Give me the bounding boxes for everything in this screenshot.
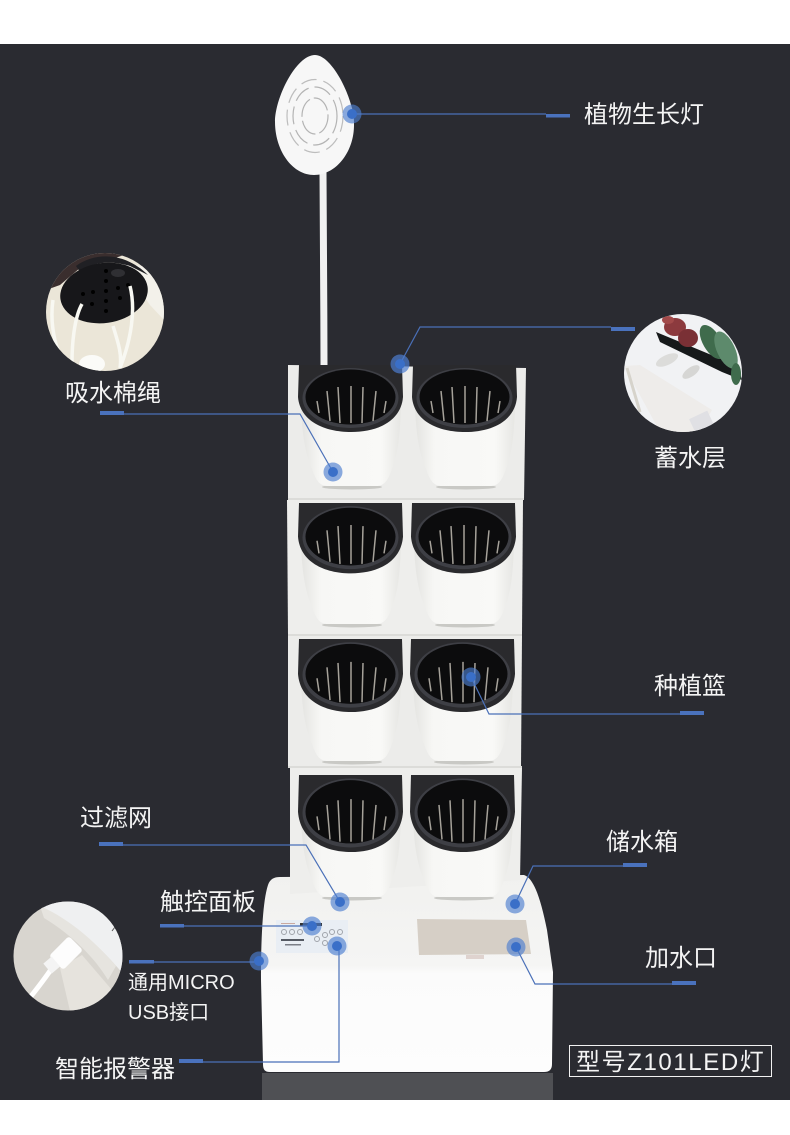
callout: growth lamp [342,104,570,124]
inset photo: reservoir layer [624,314,743,435]
label: water tank: 储水箱 [606,829,678,856]
callout: USB port [129,952,268,970]
label: reservoir layer: 蓄水层 [654,445,726,472]
label: USB port [128,971,235,1024]
growth lamp head [275,55,354,175]
tower body [287,365,526,894]
water tank base [261,875,553,1072]
label: water inlet: 加水口 [645,945,717,972]
callout: water inlet [506,938,696,985]
label: touch panel: 触控面板 [160,889,256,916]
callout: wicking cord [100,411,342,482]
label: USB port: 通用MICRO [128,971,235,994]
callout: planting basket [462,668,704,715]
inset photo: wicking cord [46,253,164,373]
label: USB port: USB接口 [128,1001,209,1024]
planting pots [298,365,517,900]
base reflection [262,1073,553,1100]
label: wicking cord: 吸水棉绳 [65,380,161,407]
label: planting basket: 种植篮 [654,673,726,700]
label: growth lamp: 植物生长灯 [584,102,704,128]
touch control panel [276,920,348,953]
label: filter: 过滤网 [80,805,152,832]
label: smart alarm: 智能报警器 [55,1056,175,1083]
model badge: 型号Z101LED灯 [576,1049,765,1076]
lamp stem [323,172,324,366]
callout: reservoir layer [390,327,635,374]
callout: smart alarm [179,936,346,1063]
callout: touch panel [160,916,322,936]
inset photo: USB port [13,901,124,1011]
water inlet lid [417,919,531,959]
callout: water tank [506,863,647,914]
callout: filter [99,842,350,912]
